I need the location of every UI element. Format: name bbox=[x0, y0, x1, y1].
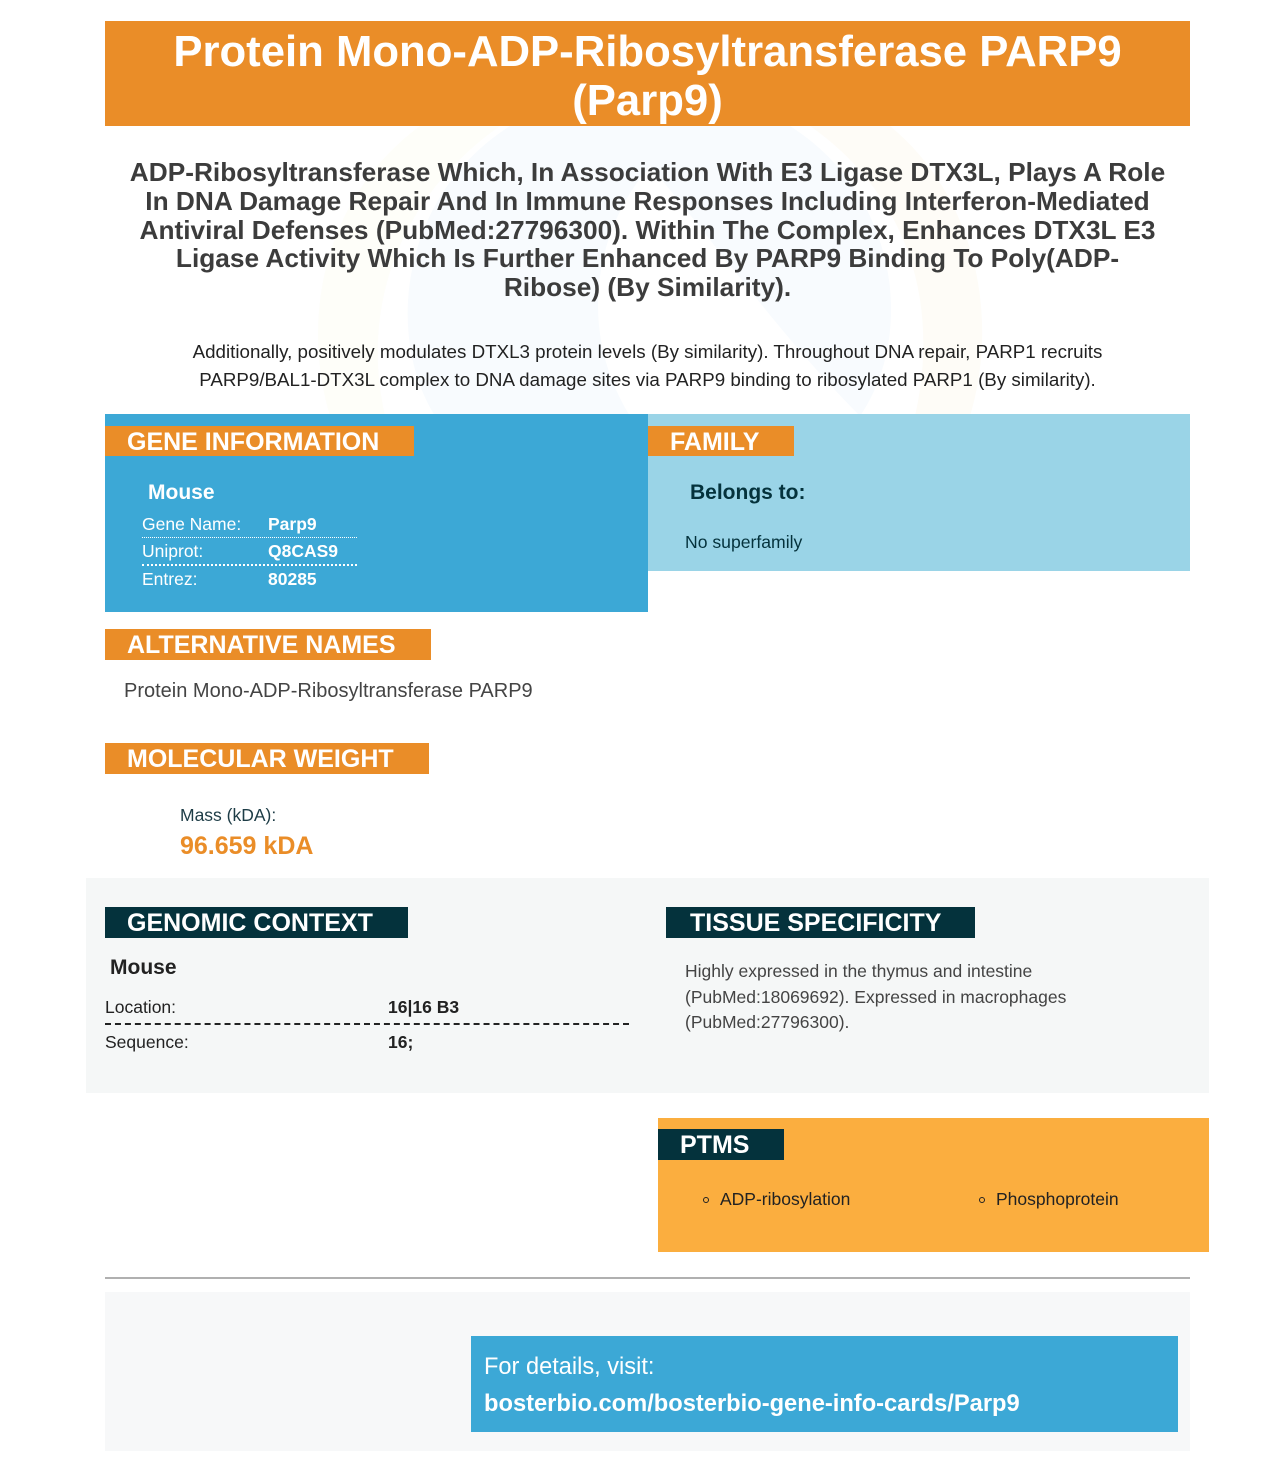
gene details table: Gene Name: bbox=[142, 514, 241, 534]
alternative names text: Protein Mono-ADP-Ribosyltransferase PARP9 bbox=[124, 680, 533, 702]
heading: molecular weight: MOLECULAR WEIGHT bbox=[127, 745, 394, 773]
gene details table: Entrez: bbox=[142, 569, 197, 589]
panel: family bbox=[648, 414, 1190, 571]
title banner: (Parp9) bbox=[572, 76, 723, 125]
heading: genomic context: GENOMIC CONTEXT bbox=[127, 909, 373, 937]
panel: genomic context and tissue specificity bbox=[86, 878, 1209, 1093]
gene details table: Q8CAS9 bbox=[268, 541, 338, 561]
heading: tissue specificity: TISSUE SPECIFICITY bbox=[690, 909, 941, 937]
heading: gene information: GENE INFORMATION bbox=[127, 428, 379, 456]
url: bosterbio.com/bosterbio-gene-info-cards/Parp9 bbox=[484, 1391, 1020, 1417]
species label: Mouse bbox=[110, 956, 177, 979]
summary heading: Ligase Activity Which Is Further Enhanced By PARP9 Binding To Poly(ADP- bbox=[176, 243, 1119, 273]
description text: Additionally, positively modulates DTXL3 protein levels (By similarity). Throughout DNA repair, PARP1 recruits bbox=[193, 341, 1102, 362]
summary heading: Ribose) (By Similarity). bbox=[504, 272, 791, 302]
callout: details link bbox=[471, 1336, 1178, 1432]
gene details table bbox=[142, 514, 357, 589]
heading: family bbox=[648, 426, 794, 456]
visit label: For details, visit: bbox=[484, 1354, 654, 1380]
sequence row: 16; bbox=[388, 1032, 413, 1052]
mass value: 96.659 kDA bbox=[180, 832, 313, 860]
gene details table: Uniprot: bbox=[142, 541, 203, 561]
summary heading: In DNA Damage Repair And In Immune Responses Including Interferon-Mediated bbox=[145, 186, 1150, 216]
location row: Location: bbox=[105, 997, 176, 1017]
belongs to label: Belongs to: bbox=[690, 481, 806, 504]
mass label: Mass (kDA): bbox=[180, 805, 276, 825]
summary heading: Antiviral Defenses (PubMed:27796300). Within The Complex, Enhances DTX3L E3 bbox=[139, 215, 1156, 245]
heading: family: FAMILY bbox=[670, 428, 759, 456]
location row bbox=[105, 995, 629, 1025]
tissue specificity text: Highly expressed in the thymus and intestine bbox=[685, 961, 1032, 981]
tissue specificity text: (PubMed:27796300). bbox=[685, 1012, 849, 1032]
panel: gene information bbox=[105, 414, 648, 612]
heading: ptms: PTMS bbox=[680, 1131, 749, 1159]
ptm item: Phosphoprotein: Phosphoprotein bbox=[996, 1189, 1119, 1209]
title banner bbox=[105, 21, 1190, 126]
description text: PARP9/BAL1-DTX3L complex to DNA damage sites via PARP9 binding to ribosylated PARP1 (By similarity). bbox=[199, 369, 1096, 390]
panel: ptms bbox=[658, 1118, 1209, 1252]
title banner: Protein Mono-ADP-Ribosyltransferase PARP9 bbox=[173, 27, 1122, 76]
sequence row: Sequence: bbox=[105, 1032, 189, 1052]
tissue specificity text: (PubMed:18069692). Expressed in macrophages bbox=[685, 987, 1066, 1007]
panel: footer bbox=[105, 1292, 1190, 1451]
description text bbox=[192, 341, 1102, 390]
heading: ptms bbox=[658, 1129, 784, 1160]
location row: 16|16 B3 bbox=[388, 997, 459, 1017]
summary heading: ADP-Ribosyltransferase Which, In Association With E3 Ligase DTX3L, Plays A Role bbox=[130, 157, 1165, 187]
tissue specificity text bbox=[685, 961, 1066, 1032]
heading: alternative names: ALTERNATIVE NAMES bbox=[127, 631, 396, 659]
gene details table: Parp9 bbox=[268, 514, 317, 534]
superfamily text: No superfamily bbox=[685, 532, 802, 552]
sequence row bbox=[105, 1032, 413, 1052]
summary heading bbox=[130, 157, 1165, 302]
ptm item: ADP-ribosylation: ADP-ribosylation bbox=[720, 1189, 850, 1209]
species label: Mouse bbox=[148, 481, 215, 504]
background watermark logo bbox=[300, 126, 1000, 416]
gene details table: 80285 bbox=[268, 569, 317, 589]
